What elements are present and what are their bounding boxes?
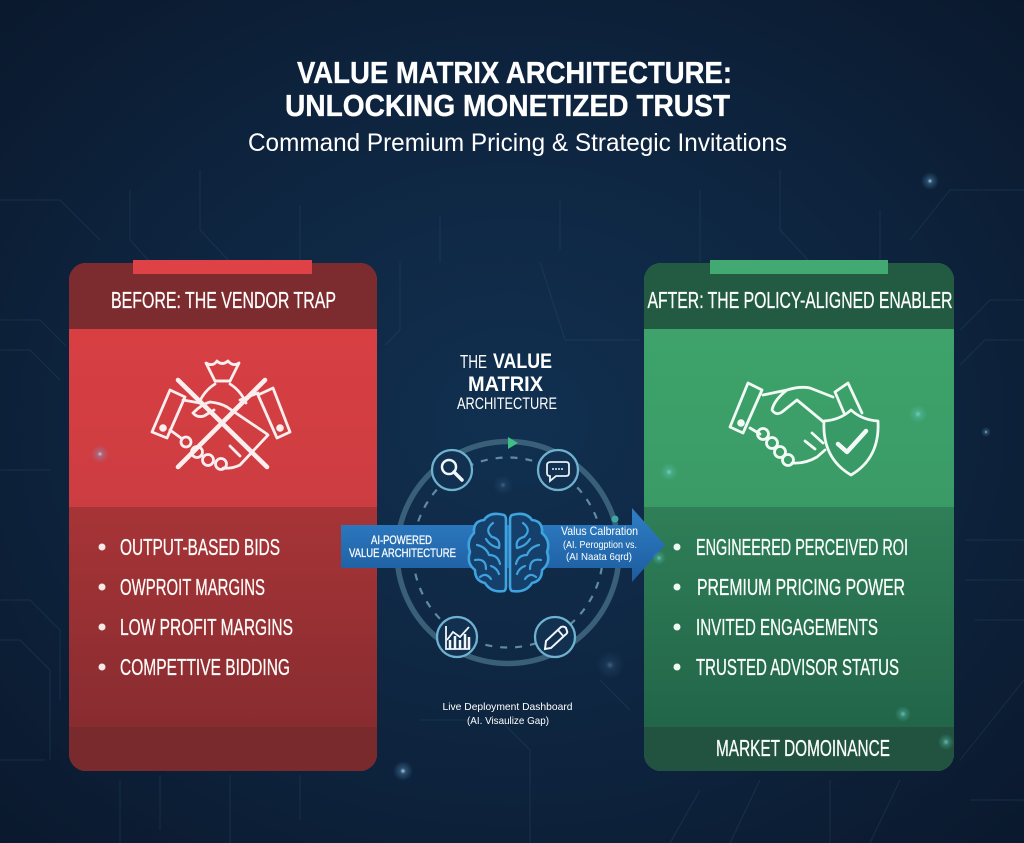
bullet list: after: [674, 534, 908, 680]
icon: speech bubble: [538, 450, 578, 490]
accent bar: after: [710, 260, 888, 274]
center heading: ARCHITECTURE: [457, 394, 557, 413]
arrow label: left: [349, 533, 456, 560]
center heading: MATRIX: [468, 373, 543, 396]
heading: before: BEFORE: THE VENDOR TRAP: [111, 287, 336, 313]
caption: dashboard: [442, 701, 573, 727]
bullet list: after: TRUSTED ADVISOR STATUS: [696, 654, 899, 680]
icon: magnifier: [432, 450, 472, 490]
icon: bar chart: [437, 617, 477, 657]
process ring: [397, 437, 619, 664]
title: [285, 55, 732, 123]
panel: after: [644, 260, 954, 771]
ring accent dot: [612, 516, 618, 522]
arrow: [341, 508, 665, 582]
bullet list: before: OWPROIT MARGINS: [120, 574, 265, 600]
arrow label: left: AI-POWERED: [371, 533, 432, 547]
bullet list: after: PREMIUM PRICING POWER: [697, 574, 905, 600]
center heading: [457, 350, 557, 413]
icon: handshake with shield: [730, 383, 878, 475]
bullet list: before: [98, 534, 293, 680]
subtitle: Command Premium Pricing & Strategic Invitations: [248, 129, 787, 157]
icon: brain: [469, 514, 548, 591]
caption: dashboard: (AI. Visaulize Gap): [467, 715, 549, 727]
panel: before: [69, 260, 377, 771]
arrow label: right: (AI Naata 6qrd): [566, 551, 632, 563]
title: UNLOCKING MONETIZED TRUST: [285, 88, 730, 123]
ring marker: [508, 437, 518, 449]
caption: dashboard: Live Deployment Dashboard: [442, 701, 573, 713]
center heading: THE: [460, 352, 487, 372]
icon: pencil: [535, 617, 575, 657]
arrow label: right: (AI. Perogption vs.: [563, 539, 637, 551]
arrow label: right: [561, 524, 638, 563]
bullet list: before: COMPETTIVE BIDDING: [120, 654, 290, 680]
arrow label: left: VALUE ARCHITECTURE: [349, 546, 456, 560]
icon: crossed handshake with money bag: [152, 361, 290, 470]
bullet list: before: LOW PROFIT MARGINS: [120, 614, 293, 640]
bullet list: before: OUTPUT-BASED BIDS: [120, 534, 280, 560]
footer: after: MARKET DOMOINANCE: [716, 735, 890, 761]
arrow label: right: Valus Calbration: [561, 524, 638, 538]
accent bar: before: [133, 260, 312, 274]
bullet list: after: INVITED ENGAGEMENTS: [696, 614, 878, 640]
center heading: VALUE: [493, 350, 552, 373]
title: VALUE MATRIX ARCHITECTURE:: [297, 55, 732, 90]
glow particles over panels: [91, 405, 954, 750]
